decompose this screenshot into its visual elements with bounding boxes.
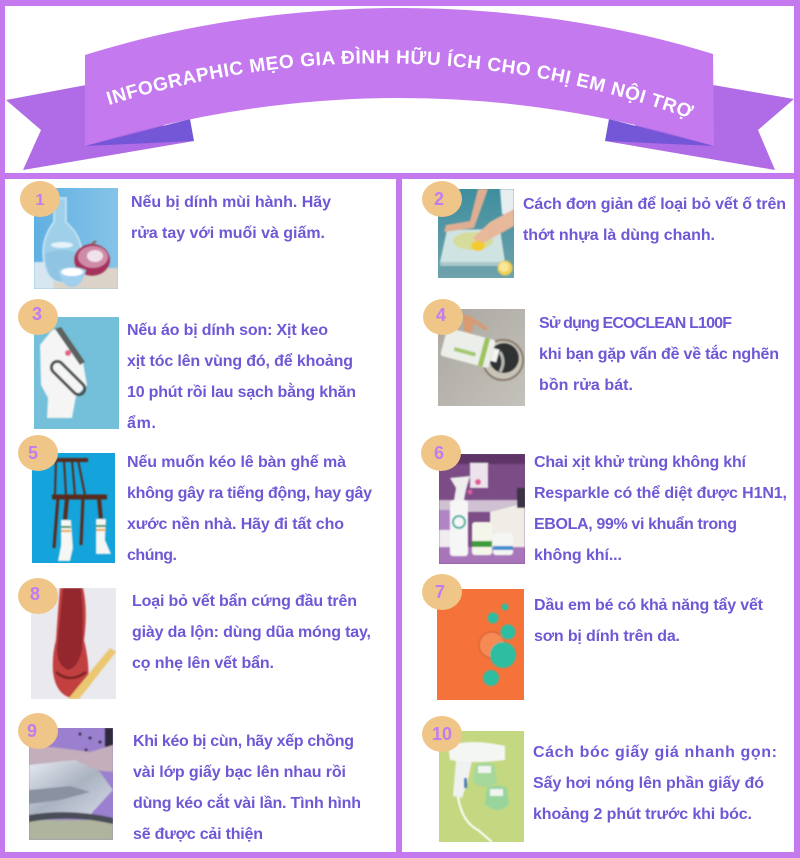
number badge 8: 8	[30, 584, 40, 604]
tip 4	[423, 299, 779, 406]
text 5: chúng.	[127, 547, 177, 564]
text 4: bồn rửa bát.	[539, 377, 633, 394]
text 5	[127, 454, 372, 564]
number badge 5: 5	[28, 443, 38, 463]
text 3: ẩm.	[127, 414, 156, 432]
number badge 2	[422, 181, 462, 217]
photo: teal drops on orange	[437, 589, 524, 700]
text 7: Dầu em bé có khả năng tẩy vết	[534, 596, 764, 614]
text 5: Nếu muốn kéo lê bàn ghế mà	[127, 454, 346, 471]
number badge 4	[423, 299, 463, 335]
ribbon left tail	[6, 85, 194, 170]
text 10: khoảng 2 phút trước khi bóc.	[533, 806, 752, 823]
number badge 5	[18, 435, 58, 471]
number badge 9: 9	[27, 721, 37, 741]
photo: hair dryer and cups	[439, 731, 524, 842]
text 7	[534, 596, 764, 645]
text 6: Chai xịt khử trùng không khí	[534, 454, 747, 471]
photo: disinfectant products in room	[439, 454, 525, 564]
tip 5	[18, 435, 372, 564]
tip 6	[421, 435, 787, 564]
text 4	[539, 315, 779, 394]
photo: pouring cleaner into drain	[438, 309, 525, 406]
text 6	[534, 454, 787, 564]
text 3: 10 phút rồi lau sạch bằng khăn	[127, 382, 356, 401]
tip 2	[422, 181, 786, 278]
text 6: EBOLA, 99% vi khuẩn trong	[534, 515, 737, 533]
number badge 2: 2	[434, 189, 444, 209]
number badge 3	[18, 299, 58, 335]
tip 9	[18, 713, 361, 843]
text 4: khi bạn gặp vấn đề về tắc nghẽn	[539, 344, 779, 363]
ribbon right fold	[605, 119, 714, 146]
text 2: thớt nhựa là dùng chanh.	[523, 227, 715, 244]
text 1: rửa tay với muối và giấm.	[131, 225, 325, 242]
text 3	[127, 322, 356, 432]
number badge 4: 4	[436, 305, 446, 325]
text 1	[131, 194, 331, 242]
text 8	[132, 592, 371, 672]
text 2: Cách đơn giản để loại bỏ vết ố trên	[523, 195, 786, 213]
number badge 10: 10	[432, 724, 452, 744]
ribbon right tail	[605, 85, 794, 170]
number badge 6	[421, 435, 461, 471]
number badge 10	[422, 716, 462, 752]
number badge 1	[20, 181, 60, 217]
text 7: sơn bị dính trên da.	[534, 628, 680, 645]
text 9: Khi kéo bị cùn, hãy xếp chồng	[133, 733, 354, 750]
tip 1	[20, 181, 331, 289]
text 8: giày da lộn: dùng dũa móng tay,	[132, 624, 371, 641]
text 2	[523, 195, 786, 244]
text 4: Sử dụng ECOCLEAN L100F	[539, 315, 732, 332]
text 9	[133, 733, 361, 843]
tip 7	[422, 574, 764, 700]
ribbon banner	[6, 8, 794, 170]
text 5: xước nền nhà. Hãy đi tất cho	[127, 516, 344, 533]
panel: right column	[402, 179, 794, 852]
photo: aluminium foil layers	[29, 728, 113, 840]
text 8: Loại bỏ vết bẩn cứng đầu trên	[132, 592, 357, 610]
title: INFOGRAPHIC MẸO GIA ĐÌNH HỮU ÍCH CHO CHỊ EM NỘI TRỢ	[106, 46, 694, 120]
text 5: không gây ra tiếng động, hay gây	[127, 485, 372, 502]
text 6: Resparkle có thể diệt được H1N1,	[534, 484, 787, 502]
text 3: xịt tóc lên vùng đó, để khoảng	[127, 352, 353, 370]
number badge 7: 7	[435, 582, 445, 602]
tip 10	[422, 716, 777, 842]
text 10: Sấy hơi nóng lên phần giấy đó	[533, 775, 764, 792]
photo: lemon on cutting board	[438, 189, 514, 278]
ribbon left fold	[85, 119, 194, 146]
number badge 8	[18, 578, 58, 614]
text 3: Nếu áo bị dính son: Xịt keo	[127, 322, 328, 339]
tip 3	[18, 299, 356, 432]
tip 8	[18, 578, 371, 699]
number badge 6: 6	[434, 443, 444, 463]
panel: header	[5, 6, 794, 173]
text 9: dùng kéo cắt vài lần. Tình hình	[133, 793, 361, 812]
text 9: vài lớp giấy bạc lên nhau rồi	[133, 764, 346, 781]
photo: red suede shoe with nail file	[31, 588, 116, 699]
number badge 3: 3	[32, 304, 42, 324]
number badge 9	[18, 713, 58, 749]
text 6: không khí...	[534, 547, 622, 564]
text 10: Cách bóc giấy giá nhanh gọn:	[533, 744, 777, 761]
number badge 7	[422, 574, 462, 610]
photo: chair with socks	[32, 453, 115, 563]
panel: left column	[5, 179, 396, 852]
photo: onion and vinegar	[34, 188, 118, 289]
ribbon main band	[85, 8, 714, 146]
photo: white shirt with lipstick	[34, 317, 119, 429]
text 10	[533, 744, 777, 823]
text 9: sẽ được cải thiện	[133, 826, 263, 843]
text 8: cọ nhẹ lên vết bẩn.	[132, 654, 274, 672]
number badge 1: 1	[36, 192, 45, 209]
text 1: Nếu bị dính mùi hành. Hãy	[131, 194, 331, 211]
